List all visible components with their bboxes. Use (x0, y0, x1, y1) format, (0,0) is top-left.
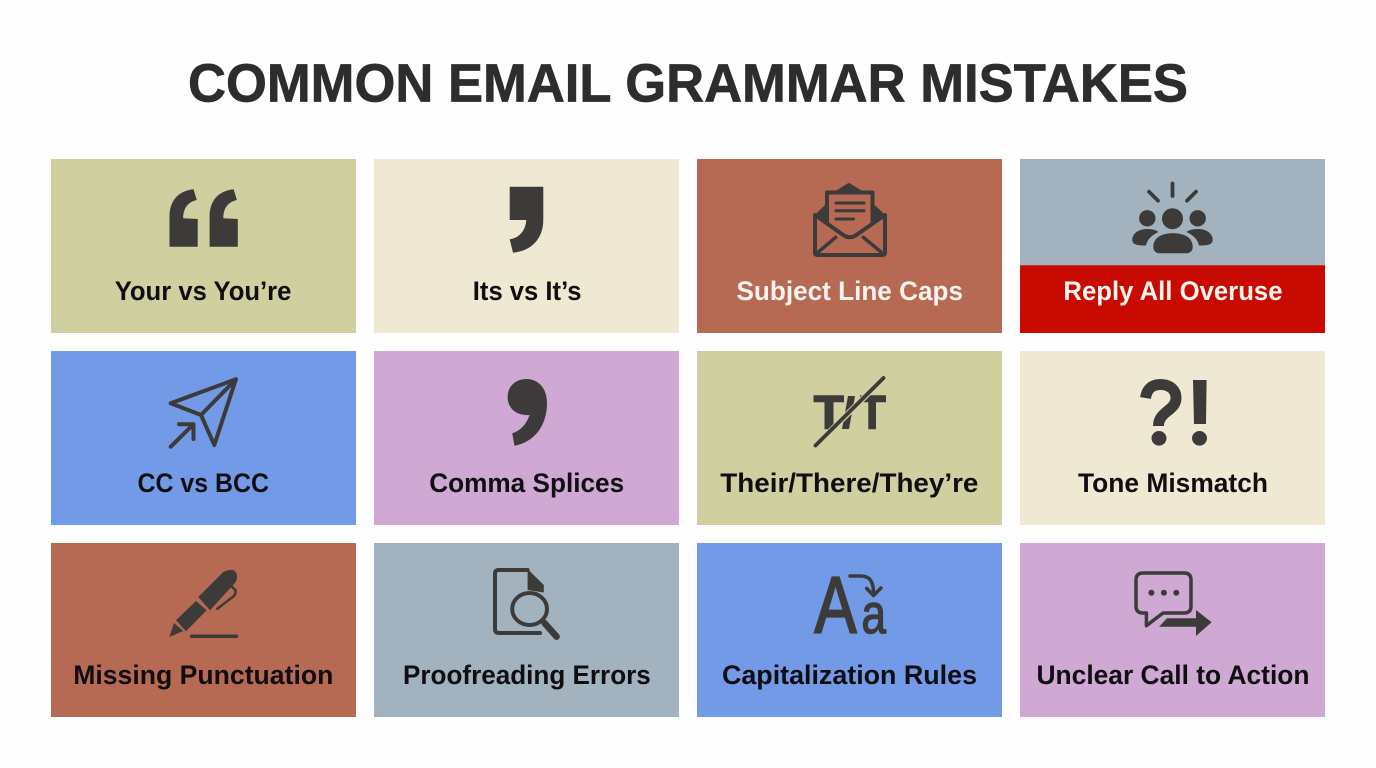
label: Its vs It’s (473, 276, 582, 306)
label: Missing Punctuation (73, 660, 333, 690)
icon: document with magnifier (495, 569, 557, 637)
label: Your vs You’re (115, 276, 291, 306)
panel: Proofreading Errors (374, 543, 679, 717)
panel: CC vs BCC (51, 351, 356, 525)
icon: A a with arrow: A (814, 560, 857, 650)
icon: A a with arrow: a (862, 582, 887, 645)
icon: open envelope (815, 183, 885, 255)
panel: Your vs You're (51, 159, 356, 333)
icon: quotation marks (170, 189, 238, 247)
icon: pen with underline (169, 570, 237, 637)
panel: Their/There/They're (697, 351, 1002, 525)
label: Comma Splices (429, 468, 624, 498)
title: COMMON EMAIL GRAMMAR MISTAKES (188, 54, 1188, 114)
label: Reply All Overuse (1063, 276, 1282, 306)
icon: chat bubble with arrow (1136, 573, 1212, 636)
icon: struck-through T/T (814, 378, 886, 446)
panel: Capitalization Rules (697, 543, 1002, 717)
icon: comma (508, 379, 547, 446)
label: Their/There/They’re (720, 468, 978, 498)
panel: Subject Line Caps (697, 159, 1002, 333)
red label band (1020, 265, 1325, 333)
panel: Reply All Overuse (1020, 159, 1325, 333)
panel: Comma Splices (374, 351, 679, 525)
icon: question and exclamation marks (1146, 380, 1207, 446)
panel: Tone Mismatch (1020, 351, 1325, 525)
panel: Its vs It's (374, 159, 679, 333)
panel: Unclear Call to Action (1020, 543, 1325, 717)
label: CC vs BCC (138, 468, 269, 498)
label: Proofreading Errors (403, 660, 651, 690)
label: Capitalization Rules (722, 660, 977, 690)
icon: group of people (1132, 184, 1213, 253)
label: Tone Mismatch (1078, 468, 1268, 498)
icon: apostrophe (510, 187, 543, 253)
label: Unclear Call to Action (1036, 660, 1310, 690)
panel: Missing Punctuation (51, 543, 356, 717)
label: Subject Line Caps (736, 276, 963, 306)
icon: paper plane with arrow (171, 379, 236, 447)
